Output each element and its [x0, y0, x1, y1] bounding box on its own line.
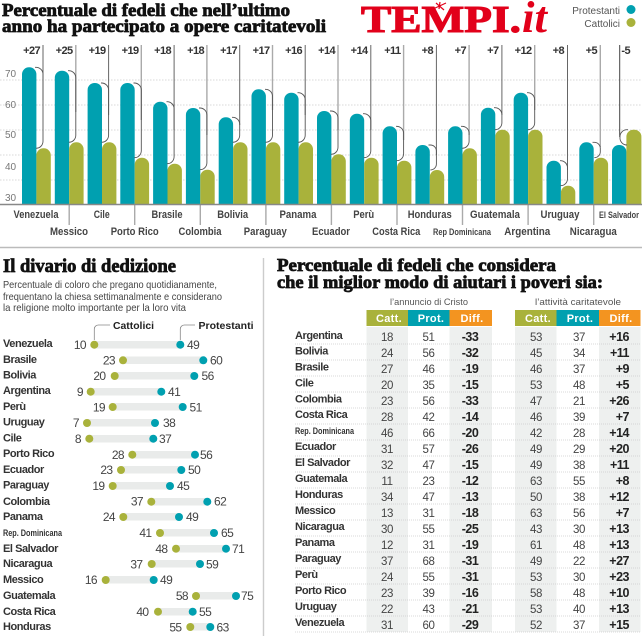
difference labels: +25 [56, 45, 73, 57]
dumbbell chart: Rep. Dominicana [3, 528, 63, 538]
table rows: Perù [295, 569, 318, 581]
dumbbell chart: 58 [176, 589, 189, 603]
dumbbell chart: Porto Rico [3, 448, 55, 460]
table rows: 22 [381, 604, 393, 616]
dumbbell chart: Nicaragua [3, 558, 53, 570]
table rows: +7 [616, 410, 630, 424]
table rows: Costa Rica [295, 409, 349, 421]
table rows: -31 [462, 570, 479, 584]
dumbbell chart: 71 [232, 542, 245, 556]
table rows: 48 [573, 588, 585, 600]
table rows: -33 [462, 394, 479, 408]
table rows: +15 [609, 618, 630, 632]
description: Percentuale di coloro che pregano quotidianamente, [3, 279, 217, 291]
legend: Protestanti [572, 6, 620, 17]
table rows: -15 [462, 378, 479, 392]
table rows: 57 [422, 444, 434, 456]
table rows: Guatemala [295, 473, 349, 485]
country labels: Bolivia [217, 209, 249, 221]
series labels: Protestanti [198, 320, 254, 332]
table subheads [390, 297, 621, 308]
series labels [94, 320, 254, 340]
table rows: -20 [462, 426, 479, 440]
heading: Il divario di dedizione [3, 257, 176, 277]
table rows [295, 330, 630, 632]
country labels: Uruguay [540, 209, 580, 221]
difference labels: +8 [553, 45, 564, 57]
dumbbell chart [3, 338, 254, 634]
table rows: 52 [530, 620, 542, 632]
dumbbell chart: 23 [100, 463, 113, 477]
difference labels: +16 [285, 45, 302, 57]
dumbbell chart: 49 [160, 573, 173, 587]
logo: Tempi.it [361, 0, 549, 42]
gap brackets [35, 67, 628, 186]
dumbbell chart: 56 [200, 448, 213, 462]
table rows: 40 [573, 604, 585, 616]
table rows: 30 [573, 524, 585, 536]
table rows: 53 [530, 604, 542, 616]
table rows: -31 [462, 554, 479, 568]
dumbbell chart: 20 [93, 369, 106, 383]
y axis and grid: 40 [5, 162, 17, 173]
table rows: 37 [381, 556, 393, 568]
difference labels: +18 [154, 45, 171, 57]
dumbbell chart: Messico [3, 574, 44, 586]
dumbbell chart: Ecuador [3, 464, 45, 476]
table rows: Colombia [295, 394, 343, 406]
table rows: 37 [573, 620, 585, 632]
table rows: 42 [530, 428, 542, 440]
baseline [0, 204, 642, 206]
dumbbell chart: 9 [77, 385, 84, 399]
table rows: 37 [573, 332, 585, 344]
table rows: 56 [422, 396, 434, 408]
bars [22, 67, 642, 204]
bar chart: participation in charitable works [0, 45, 642, 238]
table rows: Brasile [295, 362, 329, 374]
table rows: 46 [530, 412, 542, 424]
series labels: Cattolici [113, 320, 154, 332]
table rows: -18 [462, 506, 479, 520]
table rows: +8 [616, 474, 630, 488]
dumbbell chart: 19 [93, 400, 106, 414]
table rows: 23 [381, 588, 393, 600]
dumbbell chart: Venezuela [3, 338, 53, 350]
dumbbell chart: 37 [130, 558, 143, 572]
difference labels: +14 [318, 45, 336, 57]
table rows: 23 [381, 396, 393, 408]
dumbbell chart: 37 [159, 432, 172, 446]
dumbbell chart: Honduras [3, 621, 51, 633]
dumbbell chart: 19 [92, 479, 105, 493]
table rows: Paraguay [295, 553, 342, 565]
table header: Catt. [376, 313, 402, 325]
table rows: 31 [381, 444, 393, 456]
table rows: 47 [530, 396, 542, 408]
table rows: +26 [609, 394, 630, 408]
difference labels: +7 [455, 45, 466, 57]
table rows: +14 [609, 426, 630, 440]
table rows: -26 [462, 442, 479, 456]
table rows: -25 [462, 522, 479, 536]
table rows: 11 [381, 476, 393, 488]
table rows: 18 [381, 332, 393, 344]
table rows: 35 [422, 380, 434, 392]
table rows: +5 [616, 378, 630, 392]
table rows: Honduras [295, 489, 343, 501]
table subheads: l’annuncio di Cristo [390, 297, 468, 308]
dumbbell chart: 7 [73, 416, 80, 430]
table subheads: l’attività caritatevole [535, 297, 621, 308]
table rows: 22 [573, 556, 585, 568]
table rows: +9 [616, 362, 630, 376]
difference labels: +11 [384, 45, 401, 57]
table rows: -29 [462, 618, 479, 632]
difference labels: +17 [220, 45, 237, 57]
table rows: 50 [530, 492, 542, 504]
table rows: 43 [422, 604, 434, 616]
table rows: +13 [609, 538, 630, 552]
table rows: 20 [381, 380, 393, 392]
difference labels: +12 [515, 45, 532, 57]
table rows: 32 [381, 460, 393, 472]
row separators [295, 344, 640, 632]
table rows: 61 [530, 540, 542, 552]
dumbbell chart: Guatemala [3, 590, 57, 602]
table rows: -15 [462, 458, 479, 472]
dumbbell chart: 60 [210, 354, 223, 368]
table rows: 34 [381, 492, 394, 504]
description: la religione molto importante per la loro vita [3, 302, 186, 314]
dumbbell chart: Brasile [3, 354, 37, 366]
difference labels: +27 [23, 45, 40, 57]
table rows: 63 [530, 508, 542, 520]
table rows: 51 [422, 332, 434, 344]
dumbbell chart: Bolivia [3, 370, 37, 382]
table rows: 13 [381, 508, 393, 520]
table rows: 46 [381, 428, 393, 440]
table rows: Uruguay [295, 601, 338, 613]
difference labels: +18 [187, 45, 204, 57]
table rows: 46 [422, 364, 434, 376]
title: Percentuale di fedeli che nell’ultimo [2, 0, 290, 20]
dumbbell chart: 51 [190, 400, 203, 414]
table rows: Ecuador [295, 441, 337, 453]
table rows: +7 [616, 506, 630, 520]
country labels: Colombia [178, 226, 222, 238]
table rows: 34 [573, 348, 586, 360]
dumbbell chart: 16 [85, 573, 98, 587]
logo: Tempi.it: TEMPI. [361, 0, 521, 41]
dumbbell chart: Colombia [3, 496, 51, 508]
dumbbell chart: 49 [187, 338, 200, 352]
table rows: -21 [462, 602, 479, 616]
table rows: Bolivia [295, 346, 329, 358]
table rows: 38 [573, 492, 585, 504]
table rows: Nicaragua [295, 521, 345, 533]
dumbbell chart: 48 [155, 542, 168, 556]
table rows: -33 [462, 330, 479, 344]
dumbbell chart: Panama [3, 511, 44, 523]
table rows: Porto Rico [295, 585, 347, 597]
table rows: 47 [422, 460, 434, 472]
table rows: 12 [381, 540, 393, 552]
country labels [14, 209, 639, 238]
table rows: 46 [530, 364, 542, 376]
dumbbell chart: 24 [103, 510, 116, 524]
table rows: 23 [422, 476, 434, 488]
table rows: 56 [573, 508, 585, 520]
table rows: -13 [462, 490, 479, 504]
table rows: 24 [381, 572, 394, 584]
table header [366, 310, 640, 326]
table rows: +27 [609, 554, 630, 568]
country labels: Nicaragua [570, 226, 618, 238]
dumbbell chart: 62 [214, 494, 227, 508]
table rows: +12 [609, 490, 630, 504]
table rows: 27 [381, 364, 393, 376]
table rows: Cile [295, 378, 314, 390]
country labels: Paraguay [244, 226, 288, 238]
table rows: 28 [381, 412, 393, 424]
dumbbell chart: 56 [202, 369, 215, 383]
dumbbell chart: Costa Rica [3, 606, 57, 618]
heading: che il miglior modo di aiutari i poveri sia: [277, 272, 603, 292]
table rows: 42 [422, 412, 434, 424]
description: frequentano la chiesa settimanalmente e considerano [3, 291, 222, 303]
country labels: Venezuela [14, 209, 59, 221]
table header: Diff. [461, 313, 483, 325]
table rows: 49 [530, 556, 542, 568]
country labels: Porto Rico [111, 226, 159, 238]
country labels: Ecuador [312, 226, 351, 238]
dumbbell chart: 63 [216, 620, 230, 634]
dumbbell chart: 65 [221, 526, 234, 540]
dumbbell chart: 8 [75, 432, 82, 446]
title: anno ha partecipato a opere caritatevoli [2, 16, 326, 36]
y axis and grid: 50 [5, 130, 17, 141]
dumbbell chart: 49 [186, 510, 199, 524]
country labels: Guatemala [470, 209, 521, 221]
table rows: -16 [462, 586, 479, 600]
table rows: +20 [609, 442, 630, 456]
dumbbell chart: Argentina [3, 385, 52, 397]
table rows: Panama [295, 537, 336, 549]
table rows: 29 [573, 444, 585, 456]
difference labels: +14 [351, 45, 369, 57]
table header: Catt. [525, 313, 551, 325]
table rows: +16 [609, 330, 630, 344]
table rows: 31 [422, 540, 434, 552]
title [2, 0, 326, 36]
dumbbell chart: 10 [74, 338, 87, 352]
table rows: 68 [422, 556, 434, 568]
table rows: 53 [530, 332, 542, 344]
country labels: Costa Rica [372, 226, 421, 238]
table rows: 49 [530, 444, 542, 456]
country labels: Argentina [504, 226, 551, 238]
legend: Cattolici [584, 19, 620, 30]
table rows: -32 [462, 346, 479, 360]
table rows: +13 [609, 602, 630, 616]
panel: migliore modo di aiutare i poveri [277, 255, 640, 632]
y axis and grid: 30 [5, 193, 17, 204]
table rows: 37 [573, 364, 585, 376]
country labels: Cile [94, 209, 110, 221]
table rows: 55 [573, 476, 585, 488]
table rows: 53 [530, 380, 542, 392]
table rows: Messico [295, 505, 336, 517]
y axis and grid: 60 [5, 100, 17, 111]
dumbbell chart: 55 [169, 620, 182, 634]
table rows: Venezuela [295, 617, 345, 629]
table rows: El Salvador [295, 457, 351, 469]
description [3, 279, 222, 314]
table rows: 55 [422, 524, 434, 536]
table rows: -19 [462, 362, 479, 376]
dumbbell chart: 40 [136, 605, 149, 619]
dumbbell chart: 38 [163, 416, 176, 430]
dumbbell chart: 45 [177, 479, 190, 493]
dumbbell chart: 37 [131, 494, 144, 508]
dumbbell chart: 59 [206, 558, 219, 572]
dumbbell chart: Paraguay [3, 480, 50, 492]
table rows: Argentina [295, 330, 344, 342]
dumbbell chart: 50 [188, 463, 201, 477]
table rows: Rep. Dominicana [295, 426, 355, 436]
table rows: 39 [422, 588, 434, 600]
dumbbell chart: Cile [3, 432, 22, 444]
dumbbell chart: 55 [199, 605, 212, 619]
table rows: 31 [422, 508, 434, 520]
table rows: 45 [530, 348, 542, 360]
country labels: Brasile [152, 209, 182, 221]
dumbbell chart: 75 [241, 589, 254, 603]
table header: Prot. [418, 313, 444, 325]
legend [572, 5, 636, 30]
table rows: -12 [462, 474, 479, 488]
dumbbell chart: 28 [112, 448, 125, 462]
table rows: 53 [530, 572, 542, 584]
country labels: Messico [50, 226, 88, 238]
difference labels: +8 [422, 45, 433, 57]
difference labels [23, 45, 630, 57]
table rows: 21 [573, 396, 585, 408]
table rows: +11 [610, 346, 630, 360]
table rows: 30 [573, 572, 585, 584]
table rows: +11 [610, 458, 630, 472]
dumbbell chart: Perù [3, 401, 26, 413]
country labels: Perù [353, 209, 374, 221]
dumbbell chart: El Salvador [3, 543, 59, 555]
table rows: +10 [609, 586, 630, 600]
table rows: 63 [530, 476, 542, 488]
y axis and grid [0, 69, 642, 204]
difference labels: +17 [253, 45, 270, 57]
panel: il divario di dedizione [3, 257, 254, 634]
table rows: -14 [462, 410, 479, 424]
country labels: Honduras [408, 209, 452, 221]
dumbbell chart: 23 [103, 354, 116, 368]
table header: Diff. [610, 313, 632, 325]
country labels: Panama [280, 209, 317, 221]
table rows: 28 [573, 428, 585, 440]
heading: Percentuale di fedeli che considera [277, 255, 556, 275]
table rows: 39 [573, 412, 585, 424]
column backgrounds [366, 327, 640, 632]
table rows: 43 [530, 524, 542, 536]
table rows: 30 [381, 524, 393, 536]
country labels: Rep Dominicana [433, 227, 492, 237]
table header: Prot. [567, 313, 593, 325]
table rows: 55 [422, 572, 434, 584]
table rows: 56 [422, 348, 434, 360]
dumbbell chart: Uruguay [3, 416, 46, 428]
table rows: 66 [422, 428, 434, 440]
table rows: 60 [422, 620, 434, 632]
table rows: 38 [573, 460, 585, 472]
dumbbell chart: 41 [168, 385, 181, 399]
y axis and grid: 70 [5, 69, 17, 80]
leader lines [43, 45, 620, 225]
difference labels: +7 [487, 45, 499, 57]
table rows: 58 [530, 588, 542, 600]
table rows: 48 [573, 380, 585, 392]
table rows: 48 [573, 540, 585, 552]
table rows: +23 [609, 570, 630, 584]
table rows: -19 [462, 538, 479, 552]
table rows: 49 [530, 460, 542, 472]
table rows: 47 [422, 492, 434, 504]
difference labels: +19 [122, 45, 139, 57]
table rows: 31 [381, 620, 393, 632]
table rows: 24 [381, 348, 394, 360]
heading [277, 255, 603, 292]
difference labels: -5 [621, 45, 630, 57]
dumbbell chart: 41 [139, 526, 152, 540]
difference labels: +5 [586, 45, 597, 57]
difference labels: +19 [89, 45, 106, 57]
table rows: +13 [609, 522, 630, 536]
